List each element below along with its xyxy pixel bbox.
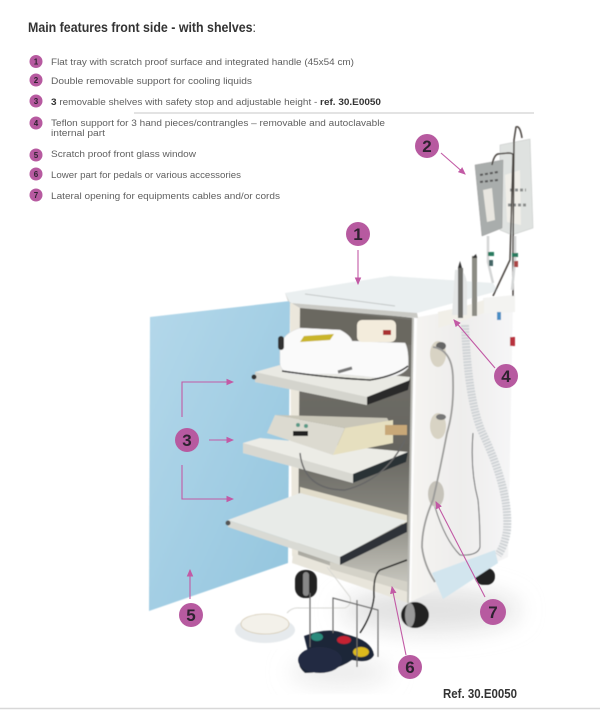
feature 4: internal part [51,128,105,139]
cart side panel [407,300,513,603]
callout 3 and arrows: 3 [182,431,192,450]
callout 2 and arrow [415,134,465,174]
cart interior [298,305,414,595]
cart front frame [290,302,408,603]
callout 4 and arrow [454,320,518,388]
callout 1 and arrow: 1 [353,225,363,244]
feature 6: 6 [34,170,39,179]
glass door [149,301,290,611]
feature 3: 3 [34,97,39,106]
reference number: Ref. 30.E0050 [443,686,517,701]
cables and hoses [422,325,507,582]
callout 4 and arrow: 4 [501,367,511,386]
callout 7 and arrow: 7 [488,603,498,622]
shelf 1 with device [252,320,410,405]
front wheel [401,602,429,628]
callout 6 and arrow: 6 [405,658,415,677]
feature 2: Double removable support for cooling liquids [51,76,252,87]
top tray [285,276,498,318]
round foot switch [235,614,295,643]
hand piece support and handpieces [438,254,515,346]
photo: dental cart with shelves [149,127,533,682]
feature 2 [30,74,252,87]
foot pedal cables [360,560,407,633]
callout 2 and arrow: 2 [422,137,432,156]
callout 1 and arrow [346,222,370,284]
black foot pedal [298,593,378,673]
feature 7: Lateral opening for equipments cables and/or cords [51,191,280,202]
callout 5 and arrow: 5 [186,606,196,625]
sterile sleeve [432,550,498,599]
feature 6: Lower part for pedals or various accessories [51,170,241,181]
title: Main features front side - with shelves: [28,19,256,35]
callout 6 and arrow [392,587,422,679]
feature list [30,55,385,202]
feature 4: 4 [34,119,39,128]
shelf 3 [226,487,407,565]
feature 7: 7 [34,191,39,200]
feature 3: 3 removable shelves with safety stop and adjustable height - ref. 30.E0050 [51,97,381,108]
IV bags [475,127,533,296]
feature 5: Scratch proof front glass window [51,149,196,160]
shelf 2 with device [243,415,408,490]
callout 3 and arrows [175,382,233,499]
feature 4: Teflon support for 3 hand pieces/contrangles – removable and autoclavable [51,118,385,129]
callout 7 and arrow [436,502,506,625]
feature 2: 2 [34,76,39,85]
feature 1: Flat tray with scratch proof surface and integrated handle (45x54 cm) [51,57,354,68]
feature 4 [30,116,385,139]
feature 1: 1 [34,58,39,66]
callout 5 and arrow [179,570,203,627]
back wheels [295,568,495,598]
feature 5: 5 [34,151,39,160]
